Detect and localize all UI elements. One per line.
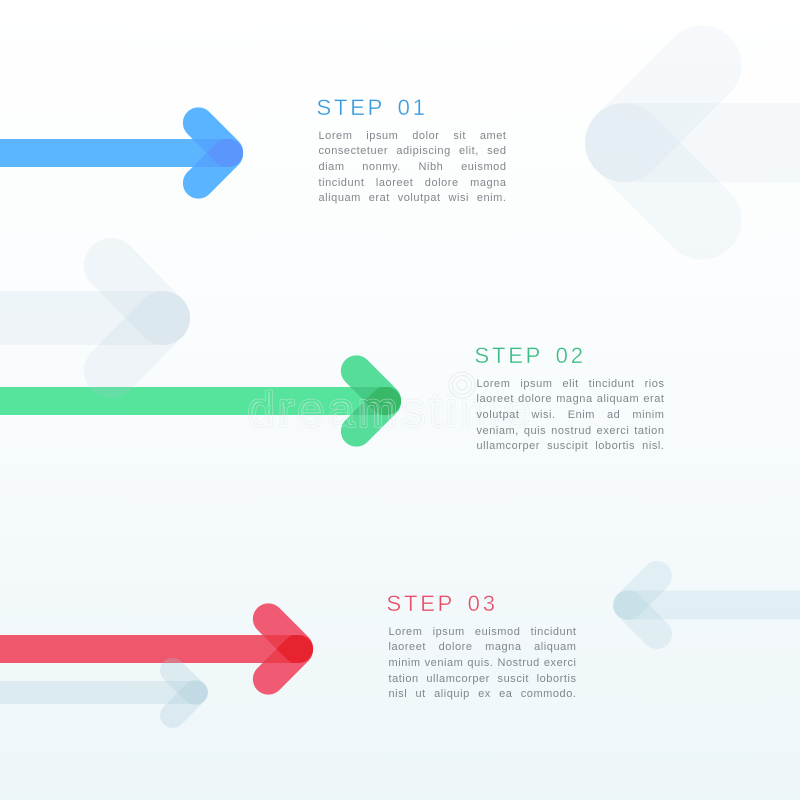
body text: step 03: tation ullamcorper suscit lobortis: [388, 673, 576, 685]
body text: step 01: Lorem ipsum dolor sit amet: [318, 130, 506, 142]
body text: step 02: [476, 378, 664, 452]
step 2 text block: [474, 343, 664, 452]
body text: step 03: nisl ut aliquip ex ea commodo.: [388, 688, 576, 700]
body text: step 01: consectetuer adipiscing elit, sed: [318, 145, 506, 157]
step 1 text block: [316, 95, 506, 204]
watermark: [248, 372, 530, 428]
ghost arrow: middle left pointing right: [0, 265, 163, 371]
heading: step 01: STEP 01: [316, 95, 428, 120]
arrow: green step 2: [0, 355, 402, 447]
step 3 text block: [386, 591, 576, 700]
body text: step 02: volutpat wisi. Enim ad minim: [476, 409, 664, 421]
body text: step 02: veniam, quis nostrud exerci tation: [476, 425, 664, 437]
body text: step 01: tincidunt laoreet dolore magna: [318, 177, 506, 189]
body text: step 03: Lorem ipsum euismod tincidunt: [388, 626, 576, 638]
body text: step 01: [318, 130, 506, 204]
ghost arrow: bottom left pointing right: [0, 670, 196, 716]
body text: step 03: minim veniam quis. Nostrud exerci: [388, 657, 576, 669]
heading: step 02: STEP 02: [474, 343, 586, 368]
heading: step 03: STEP 03: [386, 591, 498, 616]
body text: step 03: laoreet dolore magna aliquam: [388, 641, 576, 653]
body text: step 01: aliquam erat volutpat wisi enim.: [318, 192, 506, 204]
ghost arrow: top right pointing left: [624, 65, 800, 220]
body text: step 01: diam nonmy. Nibh euismod: [318, 161, 506, 173]
body text: step 02: Lorem ipsum elit tincidunt rios: [476, 378, 664, 390]
body text: step 02: laoreet dolore magna aliquam erat: [476, 393, 664, 405]
arrow: red step 3: [0, 603, 314, 695]
arrow: blue step 1: [0, 107, 244, 199]
body text: step 03: [388, 626, 576, 700]
body text: step 02: ullamcorper suscipit lobortis nisl.: [476, 440, 664, 452]
ghost arrow: lower right pointing left: [628, 576, 800, 634]
